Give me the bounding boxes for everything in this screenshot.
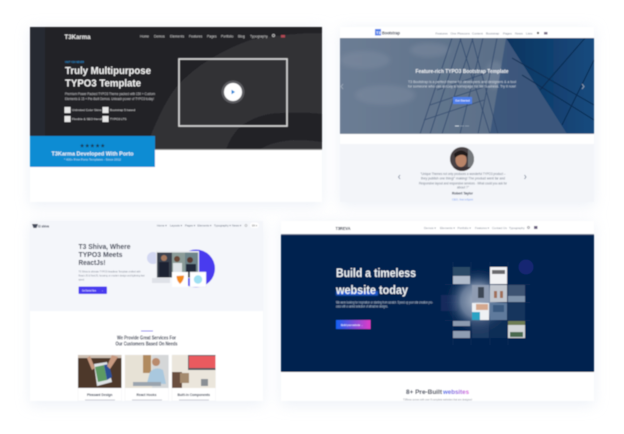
hero paragraph (65, 92, 155, 101)
hero title: website today (335, 285, 409, 297)
navigation: Typography ▾ (214, 224, 231, 228)
panel: T3 Shiva template (30, 221, 263, 401)
navigation: Pages (503, 32, 512, 36)
navigation (424, 226, 538, 230)
navigation: Features ▾ (475, 226, 490, 230)
hero button: Get Started (455, 98, 470, 102)
feature list: Bootstrap 5 based (110, 108, 135, 112)
section heading: websites (442, 390, 470, 396)
service card: pleasant design: Pleasant Design (87, 393, 112, 397)
service card: built-in components: Built-in Components (177, 393, 210, 397)
hero paragraph: We were looking for inspiration or starting from scratch. Speed up your site creation pro- (336, 300, 433, 304)
section heading (116, 336, 178, 348)
testimonial arrows (398, 175, 526, 179)
arrows (341, 84, 584, 89)
hero title: ReactJs! (78, 260, 106, 267)
banner: * 400+ Free Porto Templates - Since 2012 (64, 158, 122, 162)
navigation: Blog (238, 34, 245, 38)
hero eyebrow: UNIT YOU NEVER (65, 60, 84, 64)
logo (32, 224, 50, 228)
hero paragraph (336, 300, 433, 308)
navigation: Elements ▾ (198, 224, 212, 228)
logo: Bootstrap (382, 30, 400, 36)
hero title (78, 244, 131, 267)
navigation: Demos ▾ (424, 226, 436, 230)
hero paragraph (78, 270, 145, 282)
hero paragraph: for someone who can quickly a homepage for his business. Try it now! (408, 84, 516, 88)
hero button (453, 97, 472, 104)
navigation: Features (436, 32, 448, 36)
hero title: TYPO3 Meets (78, 252, 123, 259)
template mosaic (441, 260, 534, 345)
slider dots (455, 126, 469, 127)
navigation: Typography (509, 226, 525, 230)
banner (30, 136, 155, 167)
hero title: TYPO3 Template (65, 78, 141, 90)
logo: t3 shiva (38, 224, 50, 228)
navigation (436, 32, 548, 36)
hero paragraph: Elements & 15 + Pre-Built Demos. Unleash power of TYPO3 today! (65, 97, 154, 101)
navigation: News ▾ (232, 224, 242, 228)
navigation: One Pluscons (450, 32, 470, 36)
hero title: Truly Multipurpose (65, 66, 151, 77)
navigation: Elements ▾ (440, 226, 455, 230)
feature list: TYPO3 LTS (110, 117, 126, 121)
navigation: Layouts ▾ (170, 224, 183, 228)
hero paragraph: React-JS & NextJS, focusing on modern design and lightning-fast (78, 274, 145, 278)
navigation: Pages ▾ (185, 224, 196, 228)
service card: pleasant design (78, 355, 122, 401)
hero button: › (102, 288, 103, 292)
hero title: Build a timeless (336, 268, 416, 280)
navigation: Home (140, 34, 149, 38)
hero title (65, 66, 151, 90)
avatar (450, 147, 475, 173)
navigation: Features (189, 34, 203, 38)
hero button: Build your website → (341, 323, 363, 327)
section subtext: T3Reva comes with over 8 complete websites that are designed (403, 398, 472, 402)
service card: react hooks (125, 355, 168, 401)
hero background (281, 234, 594, 372)
feature list (64, 107, 135, 122)
navigation: Demos (154, 34, 165, 38)
navigation: Portfolio ▾ (458, 226, 471, 230)
logo (375, 29, 400, 36)
navigation: Contact Us (492, 226, 507, 230)
testimonial author: Robert Taylor (452, 190, 473, 196)
hero background (30, 27, 322, 150)
service card: built-in components (172, 355, 216, 401)
hero title (335, 268, 416, 297)
navigation: Bootstrap (486, 32, 500, 36)
navigation: Elements (170, 34, 184, 38)
navigation: Home ▾ (157, 224, 167, 228)
hero paragraph: speed. (78, 278, 85, 282)
hero button: Get Started Now (82, 288, 97, 292)
hero background (30, 221, 263, 311)
hero paragraph: T3 Bootstrap is a perfect theme for developers and designers & a tool (408, 80, 516, 84)
hero image (340, 38, 594, 134)
testimonial role: CEO, first inSpirit (452, 198, 473, 202)
hero button (78, 286, 107, 294)
panel: T3 Reva template (281, 221, 594, 402)
feature list: Unlimited Color Skins (72, 108, 102, 112)
hero paragraph: cess with a varied selection of attractive designs. (336, 304, 388, 308)
hero paragraph: Premium Power Packed TYPO3 Theme packed with 150 + Custom (65, 92, 155, 96)
section heading (406, 390, 470, 396)
testimonial panel (340, 144, 594, 202)
feature list: Flexible & SEO friendly (72, 117, 104, 121)
video frame (179, 59, 287, 126)
navigation: Typography (250, 34, 268, 38)
logo: T3 (376, 30, 381, 35)
hero title: Feature-rich TYPO3 Bootstrap Template (416, 69, 508, 75)
testimonial quote: "Unique Themes not only produces a wonderful TYPO3 product – (420, 172, 506, 176)
hero title: T3 Shiva, Where (78, 244, 131, 251)
navigation: Lists (526, 32, 533, 36)
hero collage (147, 250, 215, 288)
navigation: EN ▾ (252, 224, 257, 227)
section eyebrow (141, 330, 153, 332)
section heading: Our Customers Based On Needs (116, 342, 178, 348)
testimonial quote: Responsive layout and responsive services - What could you ask for (419, 182, 508, 186)
hero paragraph (408, 80, 516, 88)
navigation: Content (472, 32, 483, 36)
logo: T3REVA (336, 226, 351, 231)
banner: ★★★★★ (80, 142, 105, 150)
navigation (140, 34, 285, 38)
panel: T3Karma template (30, 27, 322, 202)
panel: T3 Bootstrap template (340, 27, 594, 202)
testimonial quote (419, 172, 508, 190)
logo: T3Karma (64, 34, 91, 41)
navigation (157, 222, 259, 228)
card shadows (30, 29, 594, 405)
section heading: 8+ Pre-Built (406, 390, 442, 396)
navigation: Pages (207, 34, 217, 38)
service card: react hooks: React Hooks (137, 393, 157, 397)
section heading: We Provide Great Services For (117, 336, 176, 342)
hero button (336, 320, 370, 329)
banner: T3Karma Developed With Porto (52, 152, 134, 158)
testimonial quote: about ?" (457, 186, 470, 190)
testimonial quote: they publish one thing!" making! The product went far and (421, 176, 505, 180)
navigation: Portfolio (221, 34, 234, 38)
hero paragraph: T3 Shiva is ultimate TYPO3 Headless Template crafted with (78, 270, 141, 274)
navigation: News (515, 32, 523, 36)
